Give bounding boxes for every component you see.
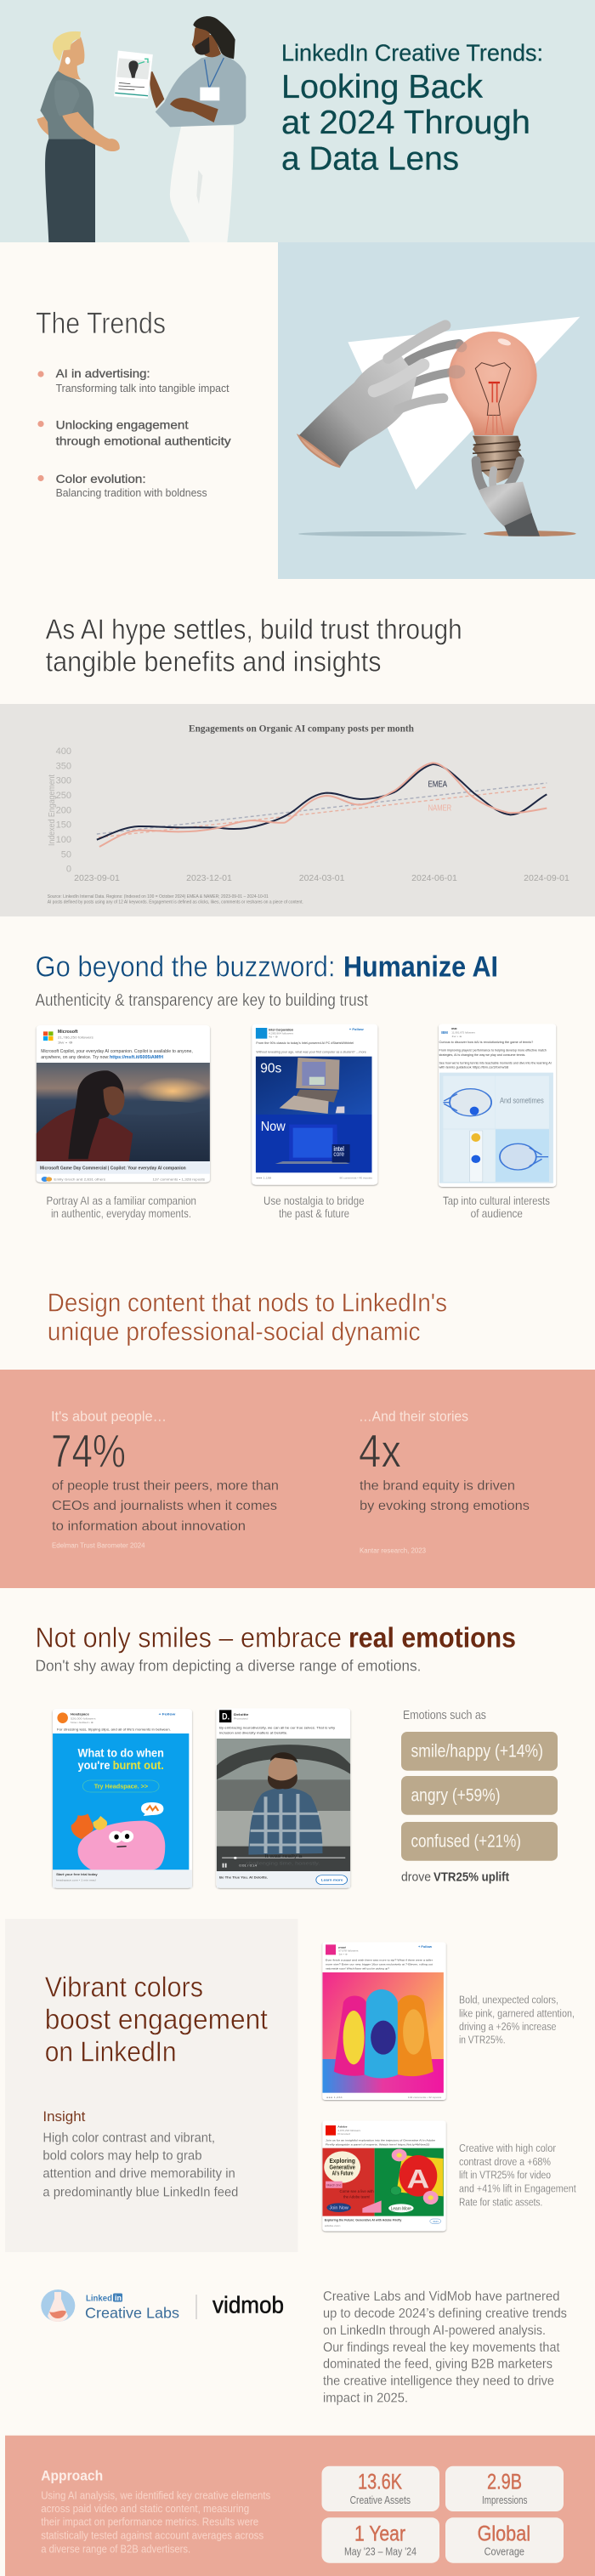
list: trends: Unlocking engagement <box>56 418 189 432</box>
card: Microsoft: Microsoft <box>58 1030 78 1035</box>
x axis: 2024-03-01 <box>299 873 345 883</box>
y axis: 300 <box>56 776 71 786</box>
card: Adobe: Adobe <box>337 2125 348 2129</box>
icon: report tablet <box>114 50 153 99</box>
text: approach description: a diverse range of B2B advertisers. <box>41 2544 190 2556</box>
card: Headspace: For stressing less, tripping slips, and all of life's moments in between. <box>57 1728 171 1731</box>
panel: vibrant colors <box>5 1919 576 2252</box>
heading: boost engagement <box>45 2004 268 2035</box>
icon: upper hand <box>298 326 459 467</box>
card: Adobe: Firefly alongside a panel of experts. Watch here! https://bit.ly/4bNew33 <box>326 2143 429 2146</box>
card: Microsoft: Microsoft Copilot, your everyday AI companion. Copilot is available to anyone, <box>41 1050 193 1054</box>
text: approach description: their impact on performance metrics. Results were <box>41 2516 258 2528</box>
chip: smile/happy <box>401 1732 558 1771</box>
insight: attention and drive memorability in <box>42 2167 235 2182</box>
card: Adobe: Promoted <box>337 2132 350 2136</box>
card: Intel: Now <box>261 1119 286 1134</box>
stat: creative assets: 13.6K <box>358 2471 402 2494</box>
captions: in authentic, everyday moments. <box>51 1206 191 1220</box>
text: high contrast note: Creative with high color <box>459 2142 557 2154</box>
card: poppi: more size? Enter our new, bigger 16oz cans exclusively at 7-Eleven, rolling out <box>326 1963 433 1966</box>
heading: The Trends: The Trends <box>36 307 166 340</box>
text: bold colors note <box>459 1994 575 2046</box>
chip: confused: confused (+21%) <box>411 1832 521 1852</box>
card: Adobe: Join <box>433 2220 439 2223</box>
text: bold colors note: driving a +26% increase <box>459 2020 556 2033</box>
title: at 2024 Through <box>281 105 530 141</box>
card: IBM: Curious to discover how #AI is revolutionizing the game of tennis? <box>439 1041 534 1044</box>
stat: creative assets: Creative Assets <box>350 2494 411 2506</box>
subheading: Authenticity & transparency are key to building trust <box>36 991 368 1010</box>
graphic: Adobe Firefly ad: Generative <box>330 2164 355 2170</box>
logo: vidmob: vidmob <box>212 2292 284 2318</box>
chart source <box>48 894 303 905</box>
captions: Tap into cultural interests <box>443 1194 550 1207</box>
icon: flask logo <box>41 2289 75 2322</box>
card: Intel: ●●● 1,198 <box>256 1177 271 1180</box>
card: IBM: 11,081,675 followers <box>451 1031 475 1035</box>
stat: coverage: Global <box>478 2522 530 2546</box>
heading: Humanize AI <box>343 950 498 983</box>
icon: light bulb <box>447 332 537 483</box>
captions: the past & future <box>279 1206 349 1220</box>
y axis: 350 <box>56 761 71 771</box>
graphic: burnt out ad: Try Headspace. >> <box>94 1783 148 1790</box>
heading <box>36 1621 516 1653</box>
text: approach description: across paid video and static content, measuring <box>41 2503 249 2515</box>
card: Intel: From the 90's classic to today's Intel-powered AI PC #StartsWithIntel <box>256 1041 354 1045</box>
card: Headspace: Headspace <box>71 1712 90 1716</box>
card: IBM: with tennis guidebook https://ibm.co/3XxmwS8 <box>439 1065 509 1070</box>
title: LinkedIn Creative Trends: <box>281 39 543 65</box>
panel: header <box>0 0 595 242</box>
text: bold colors note: Bold, unexpected colors, <box>459 1994 558 2006</box>
list: trends: Transforming talk into tangible impact <box>56 383 230 394</box>
chip: angry <box>401 1776 558 1815</box>
stat: timeframe <box>321 2517 439 2563</box>
photo: 90s computer and laptop <box>256 1057 372 1172</box>
icon: lower hand <box>476 461 540 536</box>
heading: Not only smiles – embrace <box>36 1621 342 1653</box>
text: high contrast note: Rate for static assets. <box>459 2195 542 2208</box>
text: bold colors note: like pink, garnered attention, <box>459 2006 575 2019</box>
text: partnership description: the creative intelligence they need to drive <box>323 2375 554 2389</box>
graphic: burnt out ad: burnt out. <box>113 1758 164 1772</box>
insight: Insight <box>42 2108 86 2125</box>
logo: LinkedIn Creative Labs: Creative Labs <box>85 2305 179 2322</box>
icon: man <box>150 16 246 242</box>
card: Intel: 4d • ⊕ <box>269 1036 278 1039</box>
card: Microsoft: 21,786,250 followers <box>58 1036 94 1040</box>
subheading: Don't shy away from depicting a diverse range of emotions. <box>36 1657 422 1675</box>
panel: stats on people and stories <box>0 1370 595 1588</box>
stat: 4x: the brand equity is driven <box>360 1478 515 1493</box>
stat: timeframe: May '23 – May '24 <box>344 2545 416 2557</box>
y axis: 150 <box>56 820 71 831</box>
card: Deloitte: By embracing neurodiversity, we can all be our true selves. That is why <box>219 1726 335 1730</box>
heading: Go beyond the buzzword: <box>36 950 335 983</box>
chip: smile/happy: smile/happy (+14%) <box>411 1742 543 1762</box>
heading: real emotions <box>348 1621 516 1653</box>
stat: timeframe: 1 Year <box>354 2522 405 2546</box>
heading: on LinkedIn <box>45 2035 177 2067</box>
graphic: Adobe Firefly ad: AI's Future <box>332 2170 354 2176</box>
panel: lightbulb illustration <box>278 242 595 579</box>
heading: AI hype <box>46 614 462 677</box>
card: poppi: Ever finish a poppi and wish there was more to sip? What if there were a taller <box>326 1959 434 1961</box>
photo: man in plaid shirt <box>217 1739 350 1871</box>
card: IBM: IBM <box>451 1027 457 1030</box>
emotions list: Emotions such as <box>403 1709 486 1722</box>
stat: 4x <box>359 1409 530 1555</box>
stat: 4x: …And their stories <box>359 1409 468 1425</box>
card: IBM <box>439 1024 556 1187</box>
text: partnership description: dominated the feed, giving B2B marketers <box>323 2358 552 2372</box>
text: high contrast note: lift in VTR25% for video <box>459 2169 551 2182</box>
card: Headspace: headspace.com • 1 min read <box>56 1879 96 1882</box>
text: approach description: Using AI analysis, we identified key creative elements <box>41 2489 270 2501</box>
card: Deloitte: Be The True You. At Deloitte. <box>219 1875 268 1880</box>
captions <box>46 1194 550 1220</box>
chart title: Engagements on Organic AI company posts per month <box>189 724 415 735</box>
text: partnership description: on LinkedIn through AI-powered analysis. <box>323 2324 546 2338</box>
card: poppi: + Follow <box>418 1945 433 1949</box>
card: IBM: 1w • ⊕ <box>451 1035 462 1038</box>
stat: impressions <box>445 2466 564 2511</box>
text: partnership description: up to decode 2024’s defining creative trends <box>323 2306 567 2321</box>
card: Deloitte <box>216 1708 350 1888</box>
y axis: 0 <box>66 865 71 875</box>
card: IBM: strategies, AI is changing the way we play and consume tennis. <box>439 1053 525 1057</box>
x axis: 2023-09-01 <box>74 873 120 883</box>
graphic: Adobe Firefly ad: March 2nd <box>326 2183 342 2187</box>
panel: real emotions <box>36 1621 558 1888</box>
emotions list <box>401 1709 558 1885</box>
insight <box>42 2108 238 2199</box>
heading: design content <box>48 1287 447 1347</box>
card: Deloitte: Deloitte <box>234 1713 249 1716</box>
line chart <box>97 763 547 847</box>
heading: AI hype: tangible benefits and insights <box>46 645 382 677</box>
y axis: 400 <box>56 746 71 757</box>
logo: LinkedIn Creative Labs: in <box>115 2294 122 2302</box>
title <box>281 39 543 178</box>
x axis <box>74 873 570 883</box>
heading: AI hype: As AI hype settles, build trust through <box>46 614 462 645</box>
panel: engagement chart <box>0 704 595 916</box>
card: Microsoft: Emily Groch and 2,831 others <box>54 1177 106 1182</box>
text: approach description: statistically tested against account averages across <box>41 2530 264 2542</box>
list: trends: Balancing tradition with boldness <box>56 487 207 499</box>
text: partnership description: Our findings reveal the key movements that <box>323 2341 560 2355</box>
card: IBM: See how we're turning tennis into teachable moments and dive into the learning AI <box>439 1061 552 1065</box>
graphic: burnt out ad: you're <box>78 1758 110 1772</box>
text: high contrast note <box>459 2142 576 2208</box>
card: Deloitte: D. <box>222 1711 230 1722</box>
text: bold colors note: in VTR25%. <box>459 2034 506 2046</box>
card: Microsoft: https://msft.it/6005iAMfH <box>110 1056 163 1060</box>
uplift note: drove <box>401 1870 431 1885</box>
stat: 74%: 74% <box>51 1425 126 1478</box>
graphic: Adobe Firefly ad <box>322 2148 444 2216</box>
captions: Portray AI as a familiar companion <box>46 1194 196 1207</box>
card: Adobe: Join us for an insightful exploration into the trajectory of Generative AI in Adobe <box>326 2139 435 2142</box>
card: IBM: IBM <box>441 1031 448 1036</box>
y axis: 250 <box>56 791 71 801</box>
insight: bold colors may help to grab <box>42 2149 202 2164</box>
logo: LinkedIn Creative Labs: Linked <box>86 2294 112 2304</box>
card: IBM: From improving players' performance to helping develop more effective match <box>439 1048 547 1053</box>
text: partnership description: impact in 2025. <box>323 2392 408 2406</box>
graphic: Adobe Firefly ad: the Adobe team! <box>343 2195 371 2199</box>
list: trends: AI in advertising: <box>56 366 150 380</box>
card: Adobe <box>322 2120 446 2231</box>
captions: Use nostalgia to bridge <box>264 1194 365 1207</box>
list: trends: through emotional authenticity <box>56 434 231 448</box>
panel: approach <box>5 2436 595 2576</box>
card: Intel: Intel Corporation <box>269 1028 293 1031</box>
series labels <box>428 780 451 813</box>
stat: 4x: Kantar research, 2023 <box>360 1547 427 1555</box>
heading: design content: Design content that nods to LinkedIn's <box>48 1287 447 1317</box>
card: poppi: nationwide soon! Which flavor will you be picking up? <box>326 1967 389 1971</box>
insight: a predominantly blue LinkedIn feed <box>42 2185 238 2199</box>
graphic: burnt out ad: What to do when <box>78 1746 164 1760</box>
card: Headspace <box>53 1709 192 1888</box>
card: poppi: poppi <box>338 1946 346 1949</box>
graphic: Adobe Firefly ad: Learn More <box>391 2206 411 2211</box>
heading: Approach: Approach <box>41 2469 103 2484</box>
stat: 74%: CEOs and journalists when it comes <box>52 1499 277 1513</box>
illustration: two colleagues reviewing a report <box>37 16 246 242</box>
heading: Vibrant colors <box>45 1971 203 2002</box>
x axis: 2024-09-01 <box>524 873 570 883</box>
text: partnership description <box>323 2289 567 2406</box>
card: Microsoft <box>37 1025 210 1183</box>
stat: 74%: Edelman Trust Barometer 2024 <box>52 1542 145 1550</box>
stat: impressions: Impressions <box>482 2494 527 2506</box>
heading: design content: unique professional-social dynamic <box>48 1317 421 1347</box>
y axis <box>47 746 71 875</box>
card: Intel <box>252 1024 377 1185</box>
graphic: Adobe Firefly ad: Exploring <box>330 2157 355 2165</box>
stat: 4x: 4x <box>359 1425 401 1478</box>
chart source: Source: LinkedIn Internal Data. Regions: (Indexed on 100 = October 2024) EMEA & NAMER; 2023-09-01 – 2024-10-01 <box>48 894 269 899</box>
chip: confused <box>401 1822 558 1861</box>
title: a Data Lens <box>281 141 459 177</box>
card: Intel: 80 comments • 40 reposts <box>340 1177 372 1180</box>
text: partnership description: Creative Labs and VidMob have partnered <box>323 2289 559 2304</box>
icon: woman <box>37 31 120 242</box>
list: trends: Color evolution: <box>56 472 146 485</box>
stat: 74%: of people trust their peers, more than <box>52 1478 279 1493</box>
graphic: tennis rackets <box>439 1073 553 1183</box>
card: Deloitte: Promoted <box>234 1717 248 1721</box>
stat: 74%: to information about innovation <box>52 1519 246 1534</box>
card: Adobe: adobe.com <box>325 2224 341 2227</box>
card: poppi: 57,678 followers <box>338 1949 359 1952</box>
panel: partnership <box>41 2289 567 2406</box>
y axis: Indexed Engagement <box>47 775 57 846</box>
photo: cans <box>322 1972 444 2093</box>
stat: impressions: 2.9B <box>487 2471 522 2494</box>
card: Microsoft: Microsoft Game Day Commercial | Copilot: Your everyday AI companion <box>40 1166 186 1171</box>
photo: man in plaid shirt: 0:01 / 0:14 <box>239 1864 258 1868</box>
graphic: Adobe Firefly ad: Join Now <box>330 2205 348 2210</box>
y axis: 200 <box>56 805 71 815</box>
x axis: 2023-12-01 <box>186 873 232 883</box>
card: Headspace: Start your free trial today <box>56 1873 98 1876</box>
photo: 90s computer and laptop: core <box>333 1150 344 1159</box>
card: Intel: 90s <box>260 1061 281 1076</box>
card: Microsoft: anywhere, on any device. Try now: <box>41 1056 110 1060</box>
text: high contrast note: contrast drove a +68% <box>459 2155 551 2168</box>
card: Microsoft: 3w • ⊕ <box>58 1041 73 1045</box>
card: IBM: And sometimes <box>500 1097 544 1105</box>
panel: the trends <box>36 307 231 499</box>
stat: creative assets <box>321 2466 439 2511</box>
card: Adobe: Exploring the Future: Generative AI with Adobe Firefly <box>325 2218 402 2222</box>
card: Microsoft: 137 comments • 1,328 reposts <box>152 1177 206 1182</box>
card: Intel: 4,285,904 followers <box>269 1032 293 1036</box>
list: trends <box>37 366 231 499</box>
card: Intel: + Follow <box>349 1028 364 1032</box>
series labels: NAMER <box>428 803 451 813</box>
photo: man in plaid shirt: challenging time, honestly. <box>246 1861 320 1866</box>
heading <box>45 1971 268 2067</box>
stat: 4x: by evoking strong emotions <box>360 1499 530 1513</box>
photo: woman at sunset <box>37 1063 210 1161</box>
graphic: burnt out ad <box>53 1733 189 1870</box>
uplift note <box>401 1870 509 1885</box>
stat: coverage: Coverage <box>484 2545 524 2557</box>
card: Headspace: Now • Edited • ⊕ <box>71 1721 94 1724</box>
stat: 74%: It's about people… <box>51 1409 167 1425</box>
photo: man in plaid shirt: It was really a <box>265 1854 303 1859</box>
card: poppi: 104 comments • 32 reposts <box>408 2096 442 2099</box>
panel: humanize AI <box>36 950 556 1220</box>
graphic: Adobe Firefly ad: Come see a live with <box>340 2190 374 2194</box>
card: Deloitte: Learn more <box>321 1878 344 1882</box>
card: Intel: Without revealing your age, what was your first computer as a student? …more <box>256 1050 366 1053</box>
chip: angry: angry (+59%) <box>411 1786 500 1806</box>
graphic: Adobe Firefly ad: A <box>407 2164 429 2193</box>
title: Looking Back <box>281 69 484 105</box>
card: poppi <box>322 1942 446 2100</box>
series labels: EMEA <box>428 780 447 790</box>
photo: 90s computer and laptop: intel <box>333 1145 344 1154</box>
card: Headspace: 526,000 followers <box>71 1717 96 1720</box>
stat: 74% <box>51 1409 279 1550</box>
x axis: 2024-06-01 <box>411 873 457 883</box>
text: approach description <box>41 2489 270 2556</box>
card: poppi: ●●● 1,234 <box>326 2096 343 2099</box>
insight: High color contrast and vibrant, <box>42 2131 215 2145</box>
logo: LinkedIn Creative Labs <box>85 2294 179 2322</box>
captions: of audience <box>471 1206 523 1220</box>
y axis: 50 <box>61 849 71 860</box>
chart source: AI posts defined by posts using any of 12 AI keywords. Engagement is defined as clicks, likes, comments or reshares on a piece of content. <box>48 900 303 905</box>
uplift note: VTR25% uplift <box>434 1870 509 1885</box>
card: Headspace: + Follow <box>159 1712 176 1716</box>
y axis: 100 <box>56 835 71 845</box>
card: poppi: 1w • ⊕ <box>338 1953 348 1955</box>
stat: coverage <box>445 2517 564 2563</box>
card: Adobe: 4,976,293 followers <box>337 2129 361 2132</box>
card: Deloitte: inclusion and diversity matters at Deloitte. <box>219 1731 287 1734</box>
